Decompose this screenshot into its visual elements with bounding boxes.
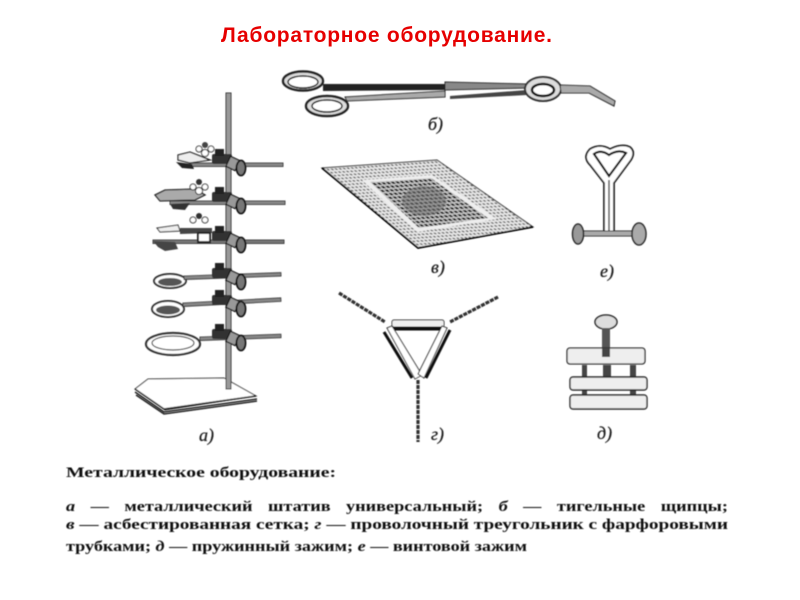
illustration: crucible tongs [283,72,615,135]
illustration: wire triangle with porcelain tubes [339,293,498,445]
illustration: asbestos wire mesh [322,160,533,278]
stand rod [226,93,231,389]
title: Лабораторное оборудование. [221,24,552,47]
label а: а) [199,425,214,446]
label д: д) [597,423,612,444]
caption line 1: а — металлический штатив универсальный; б — тигельные щипцы; [66,499,728,515]
clamp with claw 2 [155,179,285,214]
label г: г) [431,424,444,445]
caption block [66,465,728,555]
illustration: universal metal stand [135,93,285,446]
clamp with claw 3 [153,213,284,252]
label б: б) [428,114,443,135]
ring 1 [154,263,281,290]
caption line 3: трубками; д — пружинный зажим; е — винтовой зажим [66,539,527,555]
caption line 2: в — асбестированная сетка; г — проволочный треугольник с фарфоровыми [66,517,728,533]
illustration: screw clamp with heart handle [572,145,646,282]
clamp with claw 1 [176,142,283,176]
caption heading: Металлическое оборудование: [66,465,336,481]
ring 2 [152,290,281,317]
illustration: spring clamp [567,315,647,444]
ring 3 [146,324,281,355]
label е: е) [600,261,614,282]
stand base [135,378,257,414]
label в: в) [431,257,445,278]
